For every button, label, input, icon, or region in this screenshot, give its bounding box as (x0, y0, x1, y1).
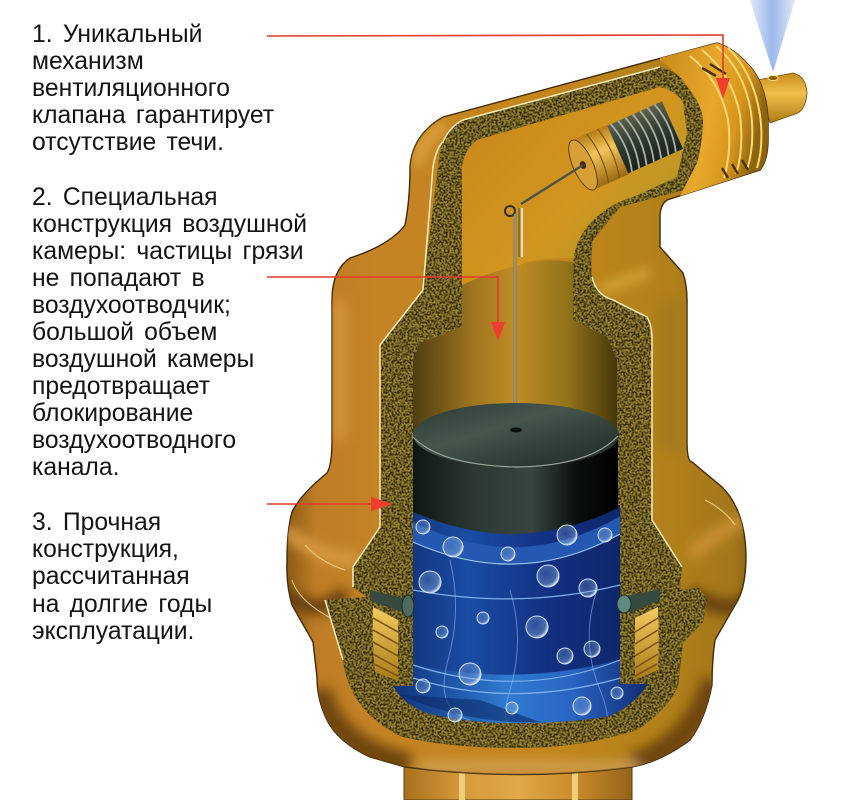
section highlight lines (325, 67, 682, 660)
air bubbles (416, 520, 623, 722)
black float (413, 403, 619, 534)
text block 3: durable construction: конструкция, (32, 536, 179, 563)
text block 2: air chamber: воздушной камеры (32, 346, 254, 373)
arrow 3: to casing wall (267, 497, 393, 511)
air chamber (413, 261, 617, 440)
soft housing shading (280, 125, 760, 767)
text block 3: durable construction: эксплуатации. (32, 618, 194, 645)
gritty casting cross-section (325, 67, 707, 748)
text block 2: air chamber: блокирование (32, 400, 193, 427)
vent valve stem (758, 73, 807, 123)
spring and valve assembly (563, 100, 684, 194)
left threaded seal (370, 590, 414, 684)
stem (404, 760, 632, 800)
text block 2: air chamber: воздухоотводчик; (32, 292, 231, 319)
text block 1: valve mechanism: 1. Уникальный (32, 21, 202, 48)
text block 2: air chamber: предотвращает (32, 373, 210, 400)
text block 2: air chamber (32, 184, 307, 481)
right threaded seal (617, 589, 660, 684)
text block 1: valve mechanism: вентиляционного (32, 75, 230, 102)
threaded cap (660, 43, 768, 196)
text block 1: valve mechanism: механизм (32, 48, 144, 75)
text block 2: air chamber: 2. Специальная (32, 184, 217, 211)
air jet cone (750, 0, 795, 72)
text block 2: air chamber: не попадают в (32, 265, 205, 292)
text block 1: valve mechanism: отсутствие течи. (32, 129, 224, 156)
text block 2: air chamber: конструкция воздушной (32, 211, 307, 238)
text block 2: air chamber: воздухоотводного (32, 427, 236, 454)
text block 3: durable construction (32, 509, 212, 645)
text block 2: air chamber: камеры: частицы грязи (32, 238, 303, 265)
upper air cavity (462, 87, 687, 327)
text block 1: valve mechanism: клапана гарантирует (32, 102, 274, 129)
text block 1: valve mechanism (32, 21, 274, 156)
text block 3: durable construction: 3. Прочная (32, 509, 161, 536)
water (390, 505, 652, 730)
vent body (280, 43, 768, 800)
arrow 1: to valve mechanism (267, 35, 730, 99)
brass housing silhouette (287, 43, 768, 774)
text block 3: durable construction: на долгие годы (32, 591, 212, 618)
bulge highlight lines (292, 500, 735, 625)
text block 2: air chamber: канала. (32, 454, 119, 481)
text block 2: air chamber: большой объем (32, 319, 217, 346)
arrow 2: to air chamber (267, 277, 505, 341)
text block 3: durable construction: рассчитанная (32, 563, 190, 590)
lever wire (505, 165, 583, 432)
